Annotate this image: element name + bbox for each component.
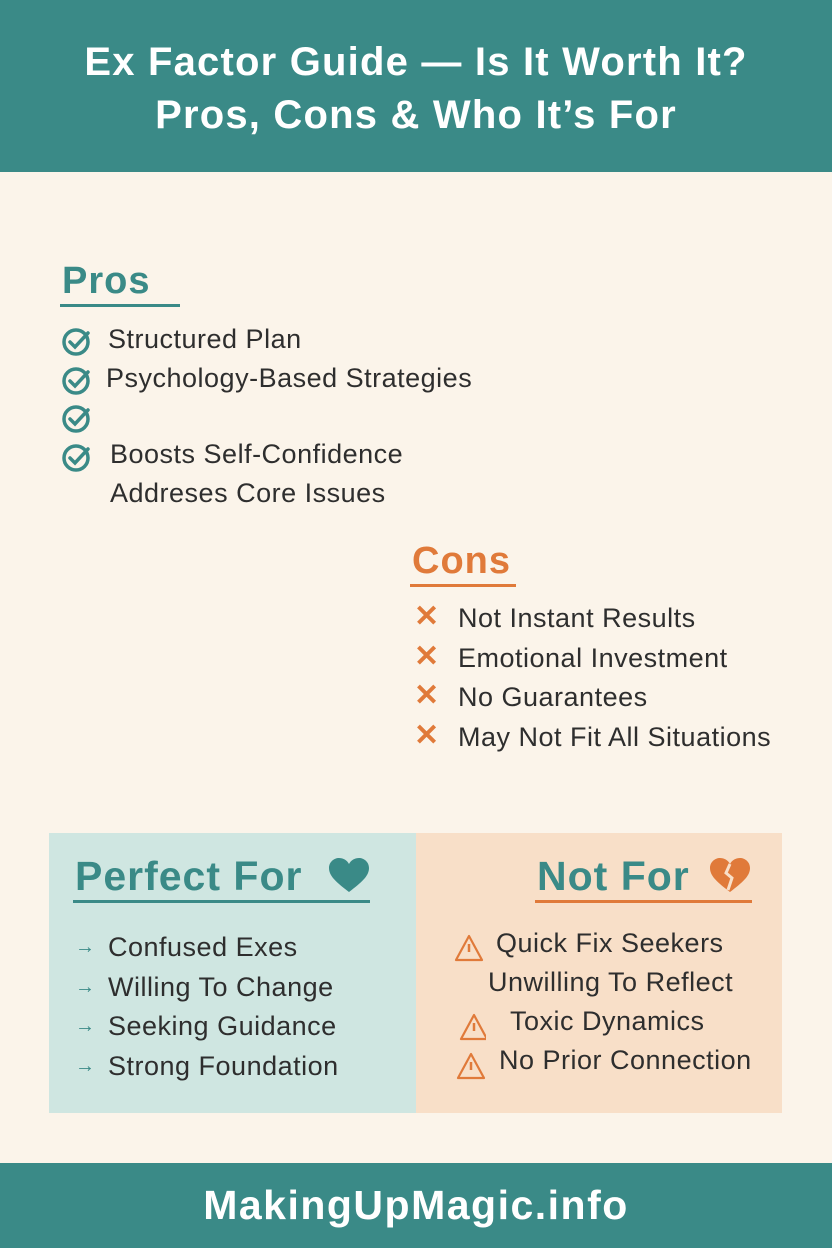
cons items xyxy=(414,600,771,752)
not for list: No Prior Connection xyxy=(499,1045,752,1075)
perfect for list xyxy=(75,932,339,1080)
perfect for list: → xyxy=(75,1054,95,1076)
cons items: No Guarantees xyxy=(458,682,648,712)
cons items: Not Instant Results xyxy=(458,603,696,633)
perfect for list: Willing To Change xyxy=(108,972,334,1002)
perfect for list: Confused Exes xyxy=(108,932,298,962)
pros items: Structured Plan xyxy=(108,324,302,354)
pros items: Boosts Self-Confidence xyxy=(110,439,403,469)
not for list: Unwilling To Reflect xyxy=(488,967,733,997)
footer xyxy=(0,1163,832,1248)
pros items: Addreses Core Issues xyxy=(110,478,386,508)
pros items xyxy=(62,324,472,508)
perfect for list: → xyxy=(75,936,95,958)
not for list xyxy=(454,928,752,1080)
panel: perfect for xyxy=(49,833,416,1113)
not for heading: Not For xyxy=(537,853,690,899)
icon: broken heart xyxy=(710,858,750,892)
header banner xyxy=(0,0,832,172)
not for list: Quick Fix Seekers xyxy=(496,928,724,958)
cons items: Emotional Investment xyxy=(458,642,728,672)
cons items: ✕ xyxy=(414,679,439,712)
cons heading: Cons xyxy=(412,540,511,582)
cons items: ✕ xyxy=(414,640,439,672)
panel: pros xyxy=(60,260,472,508)
title: Ex Factor Guide — Is It Worth It? xyxy=(84,40,748,84)
perfect for list: Strong Foundation xyxy=(108,1050,339,1080)
perfect for list: → xyxy=(75,1015,95,1037)
cons items: ✕ xyxy=(414,718,439,752)
perfect for heading: Perfect For xyxy=(75,853,302,899)
not for list: Toxic Dynamics xyxy=(510,1006,705,1036)
panel: not for xyxy=(416,833,782,1113)
perfect for list: Seeking Guidance xyxy=(108,1011,337,1041)
cons items: ✕ xyxy=(414,600,439,633)
title: Pros, Cons & Who It’s For xyxy=(155,93,677,137)
title xyxy=(84,40,748,137)
pros heading: Pros xyxy=(62,260,150,302)
perfect for list: → xyxy=(75,976,95,998)
icon: heart xyxy=(329,858,369,892)
cons items: May Not Fit All Situations xyxy=(458,722,771,752)
pros items: Psychology-Based Strategies xyxy=(106,363,472,393)
panel: cons xyxy=(410,540,771,752)
footer url: MakingUpMagic.info xyxy=(203,1182,629,1228)
